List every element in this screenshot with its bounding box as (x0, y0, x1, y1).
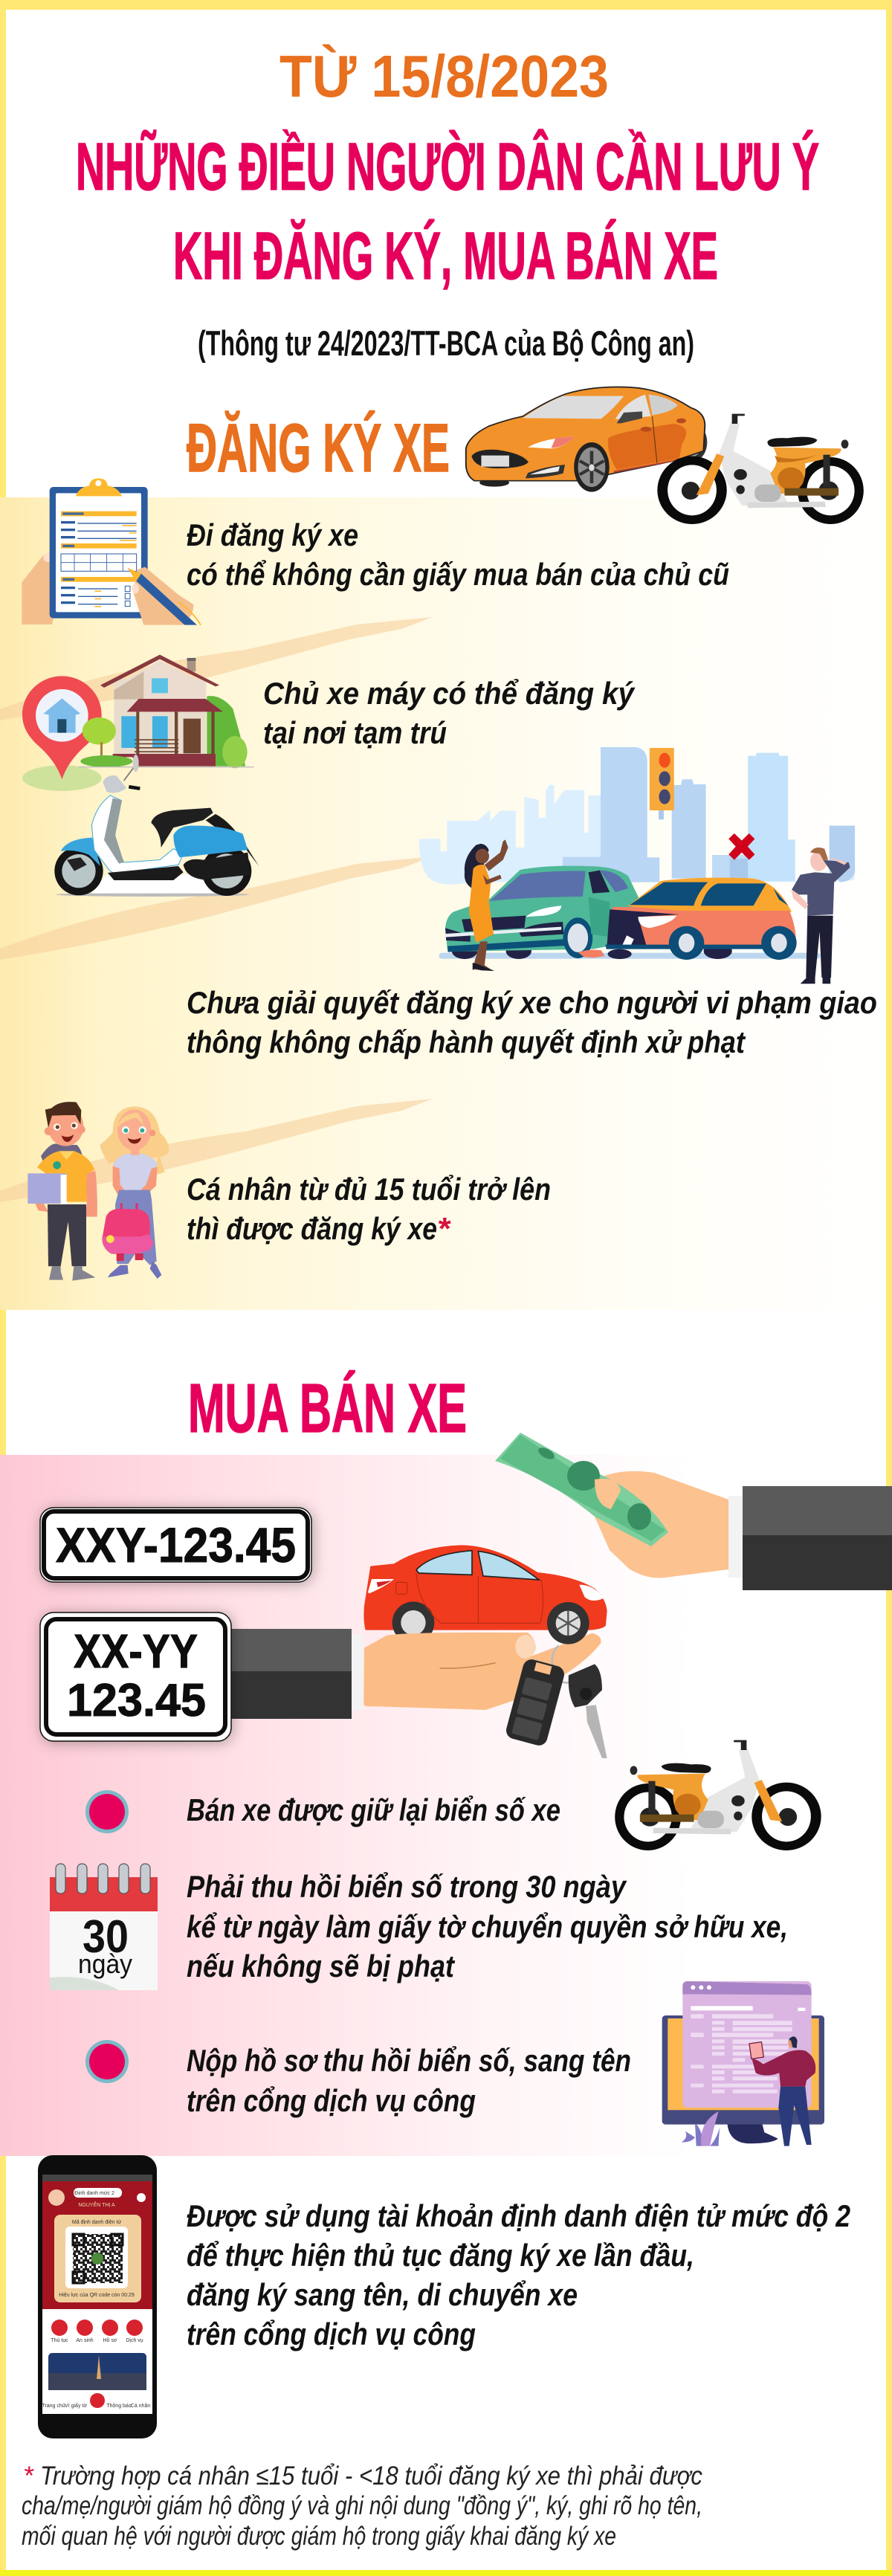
icon: calendar 30 days: 30 (83, 1911, 129, 1963)
footnote: cha/mẹ/người giám hộ đồng ý và ghi nội dung "đồng ý", ký, ghi rõ họ tên, (22, 2491, 702, 2520)
service icons and menu: Thông báo (106, 2404, 132, 2409)
icon: person at monitor (662, 1981, 824, 2146)
text: temporary residence: Chủ xe máy có thể đăng ký (263, 676, 636, 711)
text: keep plate when selling: Bán xe được giữ lại biển số xe (187, 1792, 560, 1827)
license plate horizontal (40, 1508, 311, 1582)
brush streak 1 (0, 617, 433, 720)
service icons and menu (42, 2309, 152, 2414)
text: temporary residence: tại nơi tạm trú (263, 715, 447, 750)
icon: motorbike facing right (615, 1740, 821, 1850)
icon: red car on hand with keys (363, 1545, 607, 1758)
service icons and menu: Dịch vụ (126, 2338, 143, 2343)
service icons and menu: An sinh (76, 2338, 94, 2343)
man scratching head (791, 848, 850, 984)
icon: motorbike (657, 414, 864, 524)
icon: hand holding money (495, 1433, 892, 1590)
traffic light (650, 748, 674, 819)
icon: phone with VNeID app (38, 2155, 157, 2438)
boy (28, 1102, 97, 1281)
icon: location pin and house (22, 655, 259, 897)
orange car (578, 878, 797, 960)
text: electronic identification account: để thực hiện thủ tục đăng ký xe lần đầu, (187, 2238, 694, 2273)
text: age 15: * (437, 1211, 451, 1246)
footnote: mối quan hệ với người được giám hộ trong giấy khai đăng ký xe (22, 2522, 616, 2551)
text: submit documents online: trên cổng dịch vụ công (187, 2083, 476, 2118)
text: registration without seller paper: có thể không cần giấy mua bán của chủ cũ (187, 557, 729, 592)
illustration: traffic accident scene (419, 747, 855, 984)
heading: buying and selling: MUA BÁN XE (188, 1369, 467, 1447)
text: registration without seller paper (187, 517, 729, 592)
text: age 15: thì được đăng ký xe (187, 1211, 437, 1246)
girl (100, 1106, 169, 1279)
footnote (22, 2462, 702, 2551)
text: recall plate within 30 days: kể từ ngày làm giấy tờ chuyển quyền sở hữu xe, (187, 1909, 788, 1944)
QR card: Mã định danh điện tử (72, 2219, 121, 2225)
text: submit documents online (187, 2043, 631, 2118)
title (76, 43, 819, 294)
license plate square (40, 1613, 231, 1741)
text: electronic identification account: đăng ký sang tên, di chuyển xe (187, 2277, 578, 2312)
license plate square: 123.45 (67, 1675, 206, 1726)
title: TỪ 15/8/2023 (279, 43, 609, 109)
bullet 1 (85, 1790, 129, 1833)
icon: calendar 30 days: ngày (78, 1949, 132, 1979)
service icons and menu: Ví giấy tờ (65, 2402, 87, 2409)
text: recall plate within 30 days (187, 1869, 788, 1983)
text: registration without seller paper: Đi đăng ký xe (187, 517, 358, 552)
service icons and menu: Trang chủ (42, 2403, 65, 2409)
license plate square: XX-YY (74, 1624, 198, 1678)
icon: orange car (466, 387, 707, 492)
text: age 15: Cá nhân từ đủ 15 tuổi trở lên (187, 1172, 551, 1207)
text: unresolved traffic violation: thông không chấp hành quyết định xử phạt (187, 1024, 746, 1059)
brush streak 3 (0, 1099, 433, 1202)
green car (445, 866, 639, 959)
QR card (54, 2215, 141, 2302)
coat sleeve (231, 1629, 363, 1719)
illustration: two students (28, 1102, 169, 1281)
text: electronic identification account (187, 2198, 850, 2351)
license plate horizontal: XXY-123.45 (56, 1517, 296, 1572)
text: age 15 (187, 1172, 551, 1246)
brush streak 2 (0, 856, 433, 960)
text: submit documents online: Nộp hồ sơ thu hồi biển số, sang tên (187, 2043, 631, 2078)
text: recall plate within 30 days: nếu không sẽ bị phạt (187, 1949, 456, 1983)
footnote: * (23, 2462, 34, 2491)
scooter (54, 755, 259, 897)
icon: calendar 30 days (50, 1864, 158, 1990)
service icons and menu: Cá nhân (131, 2404, 150, 2409)
panel: buy and sell background (0, 1455, 886, 2156)
service icons and menu: Thủ tục (51, 2337, 68, 2343)
text: recall plate within 30 days: Phải thu hồi biển số trong 30 ngày (187, 1869, 627, 1904)
app header: Định danh mức 2 (74, 2191, 114, 2196)
text: electronic identification account: trên cổng dịch vụ công (187, 2317, 476, 2351)
QR card: Hiệu lực của QR code còn 00:29 (59, 2292, 135, 2298)
icon: clipboard form with hands (22, 478, 201, 625)
app header: NGUYỄN THỊ A (78, 2201, 115, 2208)
service icons and menu: Hồ sơ (103, 2337, 117, 2343)
red cross (728, 833, 754, 860)
app header (48, 2188, 146, 2208)
text: unresolved traffic violation (187, 985, 877, 1059)
woman in orange dress (465, 839, 508, 971)
text: temporary residence (263, 676, 636, 750)
bullet 2 (85, 2040, 129, 2083)
heading: vehicle registration: ĐĂNG KÝ XE (187, 410, 450, 486)
city skyline (419, 747, 855, 885)
footnote: Trường hợp cá nhân ≤15 tuổi - <18 tuổi đăng ký xe thì phải được (40, 2462, 702, 2491)
panel: registration background (0, 497, 886, 1310)
